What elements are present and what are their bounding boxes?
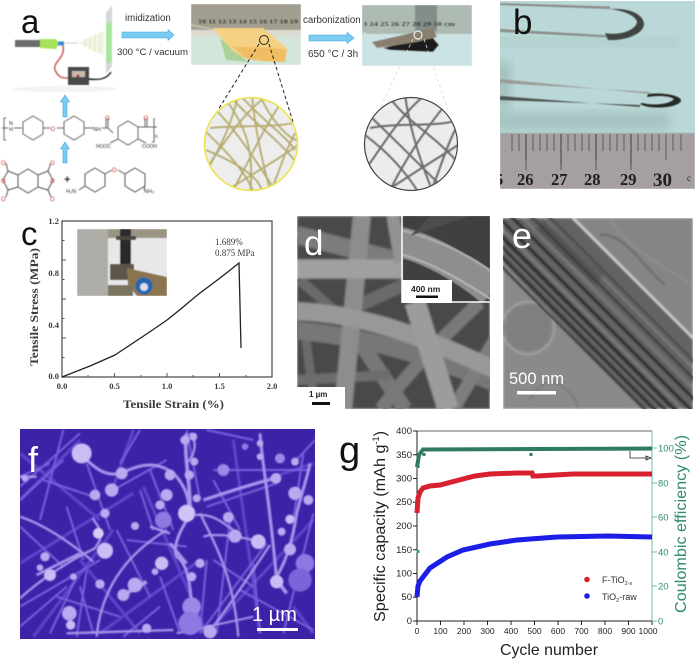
nanofiber bundle: [503, 218, 693, 409]
photo: polyimide film: [191, 4, 301, 65]
scale bar 1 um: 1 µm: [309, 390, 327, 399]
ruler: 26: [517, 170, 534, 189]
scale bar 500 nm: [510, 372, 563, 394]
polyamic acid structure: O: [105, 116, 110, 122]
monomer structures: NH₂: [144, 189, 154, 195]
carbonization label: carbonization: [303, 15, 361, 26]
x tick labels: 300: [480, 626, 495, 636]
arrow: spinning to polymer: [60, 95, 70, 117]
x tick labels: 0.5: [109, 381, 120, 391]
polyamic acid structure: O: [50, 127, 56, 133]
F-TiO2-x capacity series: [417, 473, 652, 513]
scale bar 1 um: 1 µm: [252, 604, 297, 626]
bubbles: [502, 302, 554, 354]
monomer structures: O: [50, 179, 55, 185]
monomer structures: [1, 161, 154, 203]
photo: carbonized film: 3 24 25 26 27 28 29 30 cm: [363, 21, 456, 28]
photo: polyimide film: 10 11 12 13 14 15 16 17 18 19: [198, 18, 299, 26]
right axis title: Coulombic efficiency (%): [673, 435, 690, 613]
left axis title: ): [372, 431, 389, 436]
y tick labels: [48, 216, 60, 381]
left axis title: Specific capacity (mAh g: [372, 447, 389, 622]
stress-strain curve: [62, 263, 241, 377]
photo: carbonized film: [362, 5, 472, 66]
monomer structures: O: [1, 161, 6, 167]
left y tick labels: 150: [396, 545, 412, 556]
panel label g: g: [339, 430, 360, 472]
upper tweezer and bent film: [500, 3, 620, 38]
arrow: imidization: [122, 30, 174, 40]
monomer structures: +: [64, 174, 70, 186]
ruler: 27: [551, 170, 568, 189]
polyamic acid structure: H: [9, 127, 13, 133]
monomer structures: O: [112, 168, 117, 174]
right y tick labels: 40: [658, 548, 669, 558]
panel label d: d: [304, 224, 323, 263]
polyamic acid structure: NH: [93, 127, 101, 133]
dashed zoom lines (carbon): [380, 39, 448, 110]
right y tick labels: 60: [658, 512, 669, 524]
polyamic acid structure: n: [155, 134, 158, 140]
ruler: 28: [584, 170, 600, 189]
y tick labels: 0.4: [48, 320, 60, 330]
legend: [584, 575, 637, 604]
carbonization condition: 650 °C / 3h: [308, 49, 358, 60]
right y tick labels: [658, 444, 674, 628]
magnify marker on carbon film: [414, 31, 422, 39]
legend: TiO: [602, 592, 616, 602]
panel b: flexibility photos: [490, 1, 695, 191]
monomer structures: O: [1, 179, 6, 185]
legend: 2-x: [625, 581, 633, 587]
thin background strands: [20, 430, 315, 637]
scale bar 500 nm: 500 nm: [509, 370, 564, 388]
polyamic acid structure: N: [9, 121, 13, 127]
zoom circle: polyimide fibers: [204, 95, 298, 195]
scale bar 1 um: [254, 607, 298, 631]
right y tick labels: 0: [658, 616, 663, 628]
TiO2-raw capacity series: [417, 536, 652, 597]
peak annotation: 0.875 MPa: [215, 248, 255, 258]
monomer structures: O: [50, 197, 55, 203]
legend: 2: [616, 598, 619, 604]
SEM background and fibers: [290, 216, 500, 409]
ruler: 30: [653, 170, 672, 191]
arrow: carbonization: [309, 32, 354, 44]
arrow: monomers to polymer: [60, 142, 70, 163]
polyamic acid structure: O: [144, 116, 148, 122]
monomer structures: H₂N: [66, 189, 76, 195]
coulombic efficiency series: [416, 448, 652, 553]
inset border: [402, 216, 490, 302]
x tick labels: 1000: [639, 626, 658, 636]
y tick labels: 0.8: [48, 268, 59, 278]
left y tick labels: 100: [396, 568, 412, 580]
polyamic acid structure: HOOC: [96, 144, 111, 150]
x tick labels: 700: [574, 626, 589, 636]
panel a: fabrication process: [1, 3, 472, 203]
peak annotation: [215, 237, 255, 258]
x tick labels: 0.0: [57, 381, 67, 391]
x tick labels: 1.0: [162, 381, 172, 391]
right y tick labels: 80: [658, 478, 669, 490]
TEM background: [503, 218, 693, 409]
ruler: [495, 133, 695, 191]
inset photo: tensile tester: [77, 229, 167, 296]
x tick labels: 900: [621, 626, 636, 636]
direction arrow: [630, 451, 651, 460]
left y tick labels: 350: [396, 450, 412, 461]
polyamic acid structure: [2, 116, 158, 150]
left y tick labels: [396, 426, 412, 627]
x tick labels: 600: [551, 626, 565, 636]
x tick labels: 0: [415, 626, 420, 636]
right y tick labels: 20: [658, 582, 669, 592]
magnify marker on film: [260, 36, 268, 44]
left axis title: -1: [371, 436, 381, 445]
monomer structures: O: [50, 161, 55, 167]
x tick labels: 200: [457, 626, 471, 636]
left y tick labels: 400: [396, 426, 412, 437]
bottom axis title: Cycle number: [500, 642, 599, 659]
imidization condition: 300 °C / vacuum: [117, 47, 188, 58]
x tick labels: 2.0: [267, 381, 277, 391]
legend: F-TiO: [602, 575, 625, 585]
panel label a: a: [21, 3, 40, 40]
panel f: beaded fiber SEM: [20, 429, 315, 639]
plot axes: [413, 431, 657, 625]
dashed zoom lines: [218, 44, 293, 122]
panel d: SEM image: [290, 216, 500, 409]
y axis title: Tensile Stress (MPa): [27, 248, 41, 366]
left y tick labels: 300: [396, 474, 412, 484]
lower tweezer and bent film: [500, 79, 650, 94]
icon: electrospinning setup: [13, 5, 117, 92]
left y tick labels: 200: [396, 521, 412, 532]
ruler: 29: [620, 170, 636, 189]
peak annotation: 1.689%: [215, 237, 243, 247]
photo background: [490, 1, 695, 134]
zoom circle: carbon fibers: [364, 95, 460, 195]
y tick labels: 1.2: [48, 216, 59, 226]
panel g: cycling chart: [339, 426, 690, 659]
y tick labels: 0.0: [48, 371, 59, 381]
wide mid-tone strands: [20, 430, 313, 637]
panel label e: e: [512, 215, 532, 256]
imidization label: imidization: [125, 13, 171, 24]
polyamic acid structure: COOH: [142, 144, 157, 150]
x tick labels: 800: [598, 626, 612, 636]
panel c: tensile chart: [21, 215, 277, 411]
inset SEM high magnification: [400, 216, 492, 302]
left y tick labels: 250: [396, 497, 412, 508]
x tick labels: [57, 381, 277, 391]
legend: -raw: [619, 592, 637, 602]
panel e: TEM image: [503, 218, 693, 409]
inset scale bar: [402, 280, 452, 303]
inset scale bar: 400 nm: [411, 284, 441, 294]
axes frame: [62, 221, 272, 377]
right y tick labels: 100: [658, 444, 674, 454]
x tick labels: 1.5: [214, 381, 225, 391]
x tick labels: 100: [433, 626, 448, 636]
left y tick labels: 0: [407, 616, 412, 627]
scale bar 1 um: [297, 387, 345, 409]
panel label c: c: [21, 215, 38, 252]
x tick labels: 400: [504, 626, 518, 636]
ruler: c: [687, 173, 691, 183]
x tick labels: 500: [527, 626, 542, 636]
panel label f: f: [28, 439, 39, 480]
monomer structures: O: [1, 197, 6, 203]
bright fibers: [20, 433, 310, 637]
beads: [22, 433, 314, 638]
panel label b: b: [513, 3, 532, 42]
ruler: 5: [495, 170, 503, 189]
left y tick labels: 50: [401, 592, 412, 603]
x tick labels: [415, 626, 658, 636]
x axis title: Tensile Strain (%): [123, 397, 224, 411]
